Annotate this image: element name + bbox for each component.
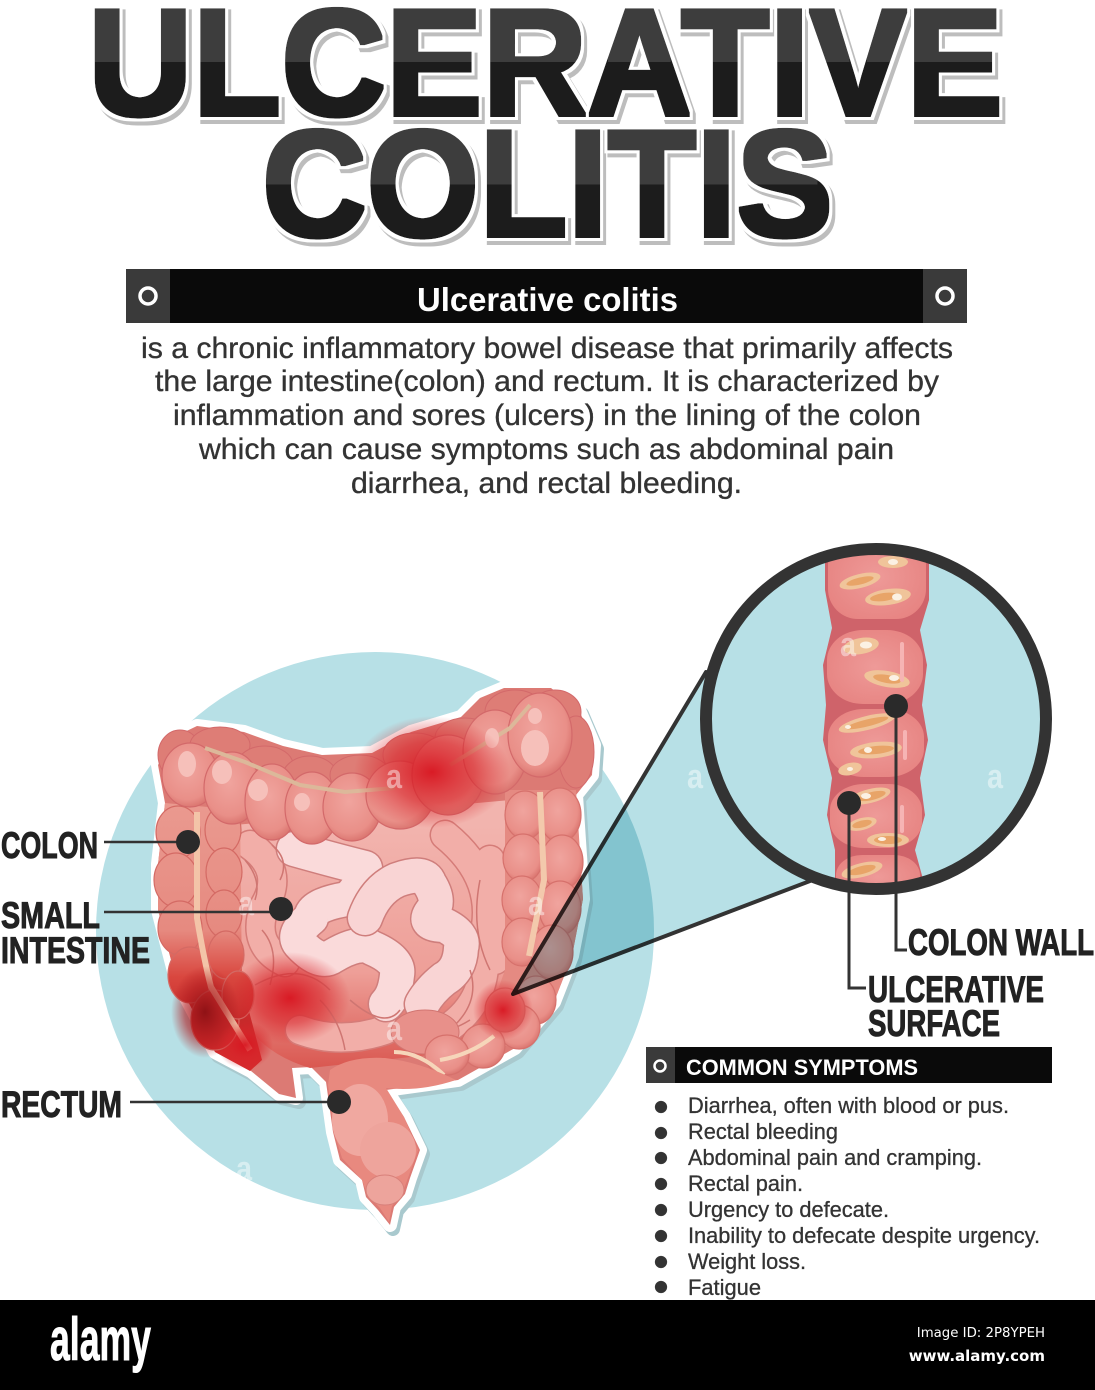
definition text block: is a chronic inflammatory bowel disease that primarily affects xyxy=(141,332,953,365)
footer bar: www.alamy.com xyxy=(909,1347,1045,1365)
symptoms list: Rectal pain. xyxy=(688,1171,803,1196)
sigmoid colon xyxy=(394,976,556,1075)
definition text block: inflammation and sores (ulcers) in the lining of the colon xyxy=(173,399,921,432)
banner: Ulcerative colitis xyxy=(126,269,967,323)
label: small intestine xyxy=(1,895,293,971)
symptoms list: Weight loss. xyxy=(688,1249,806,1274)
panel: common symptoms header: COMMON SYMPTOMS xyxy=(686,1055,918,1080)
small intestine xyxy=(235,800,510,1068)
symptoms list: Fatigue xyxy=(688,1275,761,1300)
symptoms list: Abdominal pain and cramping. xyxy=(688,1145,982,1170)
transverse colon xyxy=(158,690,594,844)
footer bar: alamy xyxy=(50,1306,151,1373)
definition text block: the large intestine(colon) and rectum. It is characterized by xyxy=(155,365,939,398)
watermarks: a xyxy=(528,885,545,923)
watermarks: a xyxy=(386,758,403,796)
title xyxy=(88,0,1003,269)
zoom cone connector xyxy=(513,672,876,994)
background loops xyxy=(250,835,501,1038)
magnifier circle xyxy=(706,535,1046,899)
footer bar xyxy=(0,1300,1095,1390)
rectum xyxy=(328,1058,456,1222)
teal background circle xyxy=(96,652,654,1210)
label: ulcerative surface: ULCERATIVE xyxy=(868,969,1044,1010)
organ silhouette with white sticker outline xyxy=(158,688,594,1225)
colon band stripe left xyxy=(197,812,250,1050)
watermarks: a xyxy=(386,1010,403,1048)
banner: Ulcerative colitis: Ulcerative colitis xyxy=(417,281,678,318)
watermarks xyxy=(236,626,1004,1188)
watermarks: a xyxy=(687,758,704,796)
watermarks: a xyxy=(840,626,857,664)
definition text block xyxy=(141,332,953,500)
label: small intestine: SMALL xyxy=(1,895,100,936)
descending colon xyxy=(480,788,583,1048)
label: colon: COLON xyxy=(1,825,98,866)
label: ulcerative surface xyxy=(837,791,1044,1044)
symptoms list: Diarrhea, often with blood or pus. xyxy=(688,1093,1009,1118)
definition text block: which can cause symptoms such as abdominal pain xyxy=(198,433,894,466)
label: ulcerative surface: SURFACE xyxy=(868,1003,1000,1044)
panel: common symptoms header xyxy=(646,1047,1052,1083)
label: colon xyxy=(1,825,200,866)
label: colon wall xyxy=(884,694,1094,963)
label: rectum: RECTUM xyxy=(1,1084,122,1125)
symptoms list: Rectal bleeding xyxy=(688,1119,838,1144)
title: COLITIS xyxy=(262,99,833,269)
label: small intestine: INTESTINE xyxy=(1,930,150,971)
symptoms list: Inability to defecate despite urgency. xyxy=(688,1223,1040,1248)
magnified colon segment xyxy=(823,535,929,899)
footer bar: Image ID: 2P8YPEH xyxy=(917,1326,1045,1341)
label: rectum xyxy=(1,1084,351,1125)
symptoms list: Urgency to defecate. xyxy=(688,1197,889,1222)
watermarks: a xyxy=(238,885,255,923)
ascending colon xyxy=(154,803,262,1071)
illustration: large intestine and small intestine xyxy=(154,688,594,1225)
watermarks: a xyxy=(987,758,1004,796)
central pale loops xyxy=(294,849,397,1004)
inflamed red areas xyxy=(171,716,533,1069)
definition text block: diarrhea, and rectal bleeding. xyxy=(351,467,742,500)
watermarks: a xyxy=(236,1150,253,1188)
symptoms list xyxy=(655,1093,1040,1300)
